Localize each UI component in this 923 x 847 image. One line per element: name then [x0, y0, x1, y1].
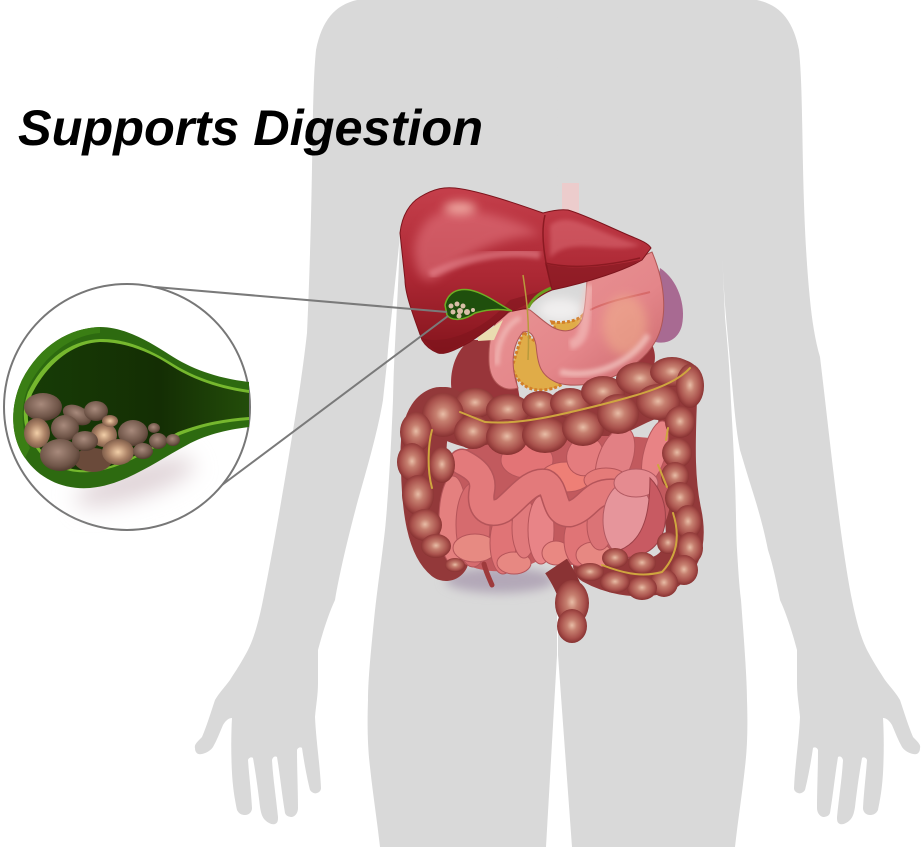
- large intestine haustra: [397, 357, 704, 600]
- shadow under intestines: [445, 567, 555, 593]
- body silhouette: [195, 0, 920, 847]
- title: Supports Digestion: [18, 100, 483, 156]
- gallbladder shadow: [71, 448, 199, 516]
- small intestine: [439, 418, 674, 574]
- liver: [400, 188, 651, 353]
- bile duct: [528, 288, 551, 308]
- magnifier callout: [4, 284, 448, 530]
- esophagus: [562, 183, 579, 215]
- gallbladder small: [445, 290, 512, 319]
- pancreas: [512, 316, 582, 390]
- pale fat under liver: [478, 320, 503, 341]
- callout circle: [4, 284, 250, 530]
- organs illustration: [397, 183, 704, 643]
- dark organ behind stomach: [451, 340, 655, 400]
- callout pointer lines: [155, 287, 448, 485]
- blood vessels: [429, 368, 690, 574]
- spleen: [650, 268, 683, 343]
- large intestine base: [423, 384, 685, 577]
- appendix: [484, 564, 492, 585]
- stomach: [489, 252, 664, 389]
- gallbladder enlarged: [13, 327, 249, 488]
- rectum: [555, 566, 589, 643]
- light glow behind stomach: [538, 298, 582, 322]
